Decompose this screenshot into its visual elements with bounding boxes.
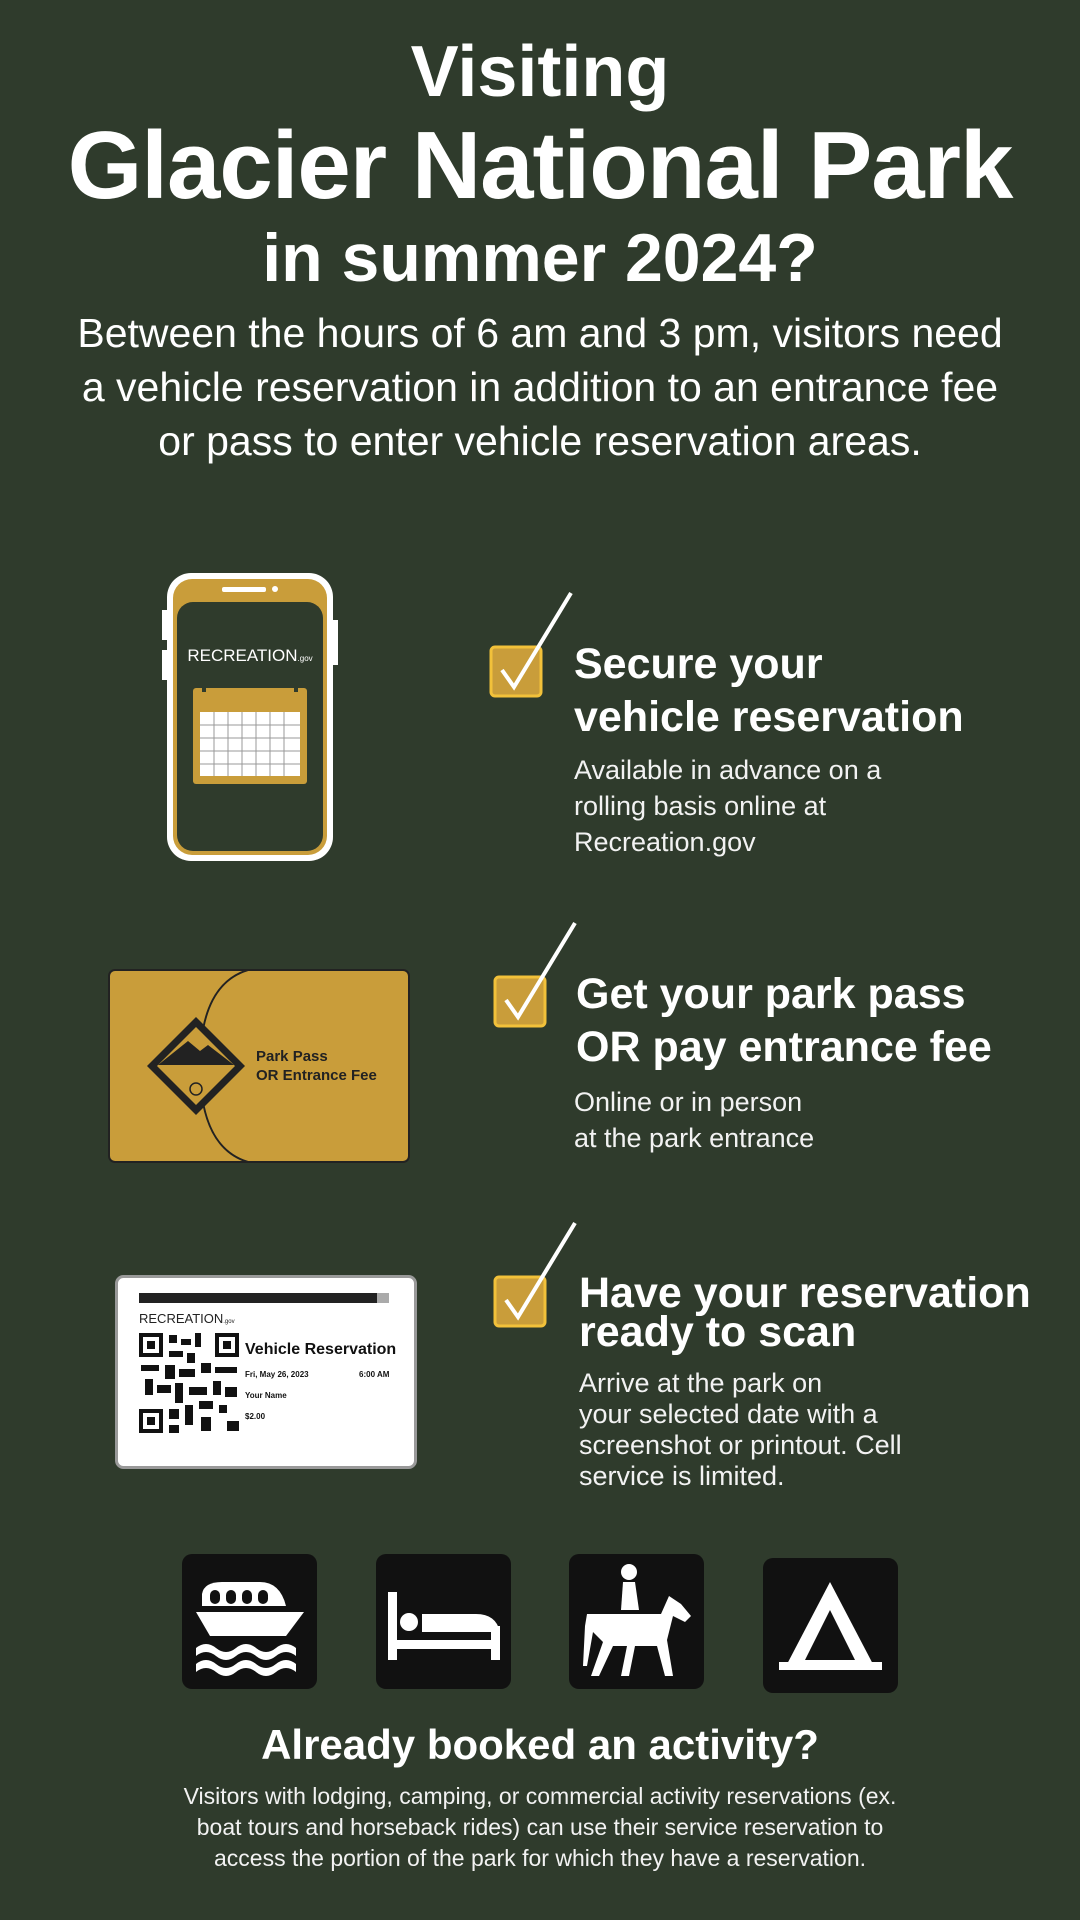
body 2: [574, 1087, 814, 1153]
heading 1: [574, 640, 964, 741]
step 2: [494, 922, 992, 1153]
icon: reservation ticket: RECREATION.gov: [139, 1311, 235, 1326]
title: in summer 2024?: [262, 220, 818, 296]
title: Visiting: [411, 32, 669, 112]
body 1: rolling basis online at: [574, 791, 826, 821]
icon: boat: [182, 1554, 317, 1689]
body 1: [574, 755, 882, 857]
body 1: Available in advance on a: [574, 755, 881, 785]
intro text: Between the hours of 6 am and 3 pm, visitors need: [77, 310, 1003, 356]
icon: horseback: [569, 1554, 704, 1689]
heading 3: Have your reservation: [579, 1269, 1031, 1317]
icon: check 1: [490, 592, 573, 698]
icon: reservation ticket: Fri, May 26, 2023: [245, 1370, 309, 1379]
footer text: access the portion of the park for which they have a reservation.: [214, 1845, 866, 1871]
icon: check 3: [494, 1222, 577, 1328]
heading 1: vehicle reservation: [574, 693, 964, 741]
icon: check 2: [494, 922, 577, 1028]
icon: reservation ticket: $2.00: [245, 1412, 266, 1421]
activity icons: [182, 1554, 898, 1693]
body 3: your selected date with a: [579, 1399, 878, 1429]
intro text: [77, 310, 1003, 464]
icon: reservation ticket: [115, 1275, 417, 1469]
step 3: [494, 1222, 1031, 1491]
heading 2: OR pay entrance fee: [576, 1023, 992, 1071]
body 2: at the park entrance: [574, 1123, 814, 1153]
title: [68, 32, 1014, 296]
icon: phone: [162, 573, 338, 861]
footer text: boat tours and horseback rides) can use their service reservation to: [197, 1814, 883, 1840]
icon: reservation ticket: Vehicle Reservation: [245, 1341, 396, 1358]
body 3: service is limited.: [579, 1461, 785, 1491]
footer text: Visitors with lodging, camping, or commercial activity reservations (ex.: [184, 1783, 896, 1809]
footer text: [184, 1783, 896, 1871]
body 3: screenshot or printout. Cell: [579, 1430, 902, 1460]
heading 2: Get your park pass: [576, 970, 966, 1018]
icon: phone: RECREATION.gov: [187, 646, 313, 665]
heading 3: ready to scan: [579, 1308, 856, 1356]
icon: park pass card: [108, 969, 410, 1163]
body 3: [579, 1368, 902, 1491]
heading 1: Secure your: [574, 640, 823, 688]
title: Glacier National Park: [68, 112, 1012, 219]
heading: already booked: Already booked an activity?: [261, 1721, 819, 1768]
body 3: Arrive at the park on: [579, 1368, 822, 1398]
step 1: [490, 592, 964, 857]
icon: lodging bed: [376, 1554, 511, 1689]
intro text: a vehicle reservation in addition to an entrance fee: [82, 364, 998, 410]
icon: park pass card: Park Pass: [256, 1048, 328, 1065]
icon: tent: [763, 1558, 898, 1693]
body 2: Online or in person: [574, 1087, 802, 1117]
icon: park pass card: OR Entrance Fee: [256, 1067, 377, 1084]
intro text: or pass to enter vehicle reservation areas.: [158, 418, 922, 464]
icon: reservation ticket: 6:00 AM: [359, 1370, 390, 1379]
icon: reservation ticket: Your Name: [245, 1391, 287, 1400]
heading 2: [576, 970, 992, 1071]
body 1: Recreation.gov: [574, 827, 756, 857]
heading 3: [579, 1269, 1031, 1356]
